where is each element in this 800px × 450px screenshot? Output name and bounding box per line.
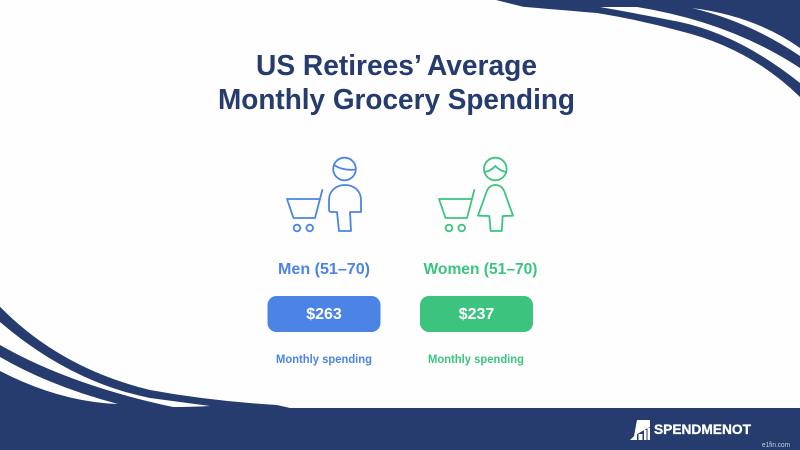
watermark: e1fin.com <box>762 442 790 449</box>
bottom-left wave and footer band <box>0 307 800 450</box>
icon: man with shopping cart <box>287 158 361 231</box>
top-right wave decoration <box>496 0 800 97</box>
value badge: men <box>268 296 380 332</box>
caption: men monthly spending: Monthly spending <box>276 352 372 366</box>
value badge: women <box>420 296 533 332</box>
label: men age group: Men (51–70) <box>278 261 370 278</box>
title: Monthly Grocery Spending <box>218 84 575 116</box>
title <box>218 50 575 116</box>
icon: woman with shopping cart <box>439 158 513 231</box>
icon: Spendmenot logo mark <box>630 420 650 440</box>
value badge: women: $237 <box>459 306 494 323</box>
caption: women monthly spending: Monthly spending <box>428 352 524 366</box>
title: US Retirees’ Average <box>256 50 537 82</box>
label: women age group: Women (51–70) <box>424 261 538 278</box>
value badge: men: $263 <box>306 306 342 323</box>
logo wordmark: SPENDMENOT <box>654 421 751 437</box>
